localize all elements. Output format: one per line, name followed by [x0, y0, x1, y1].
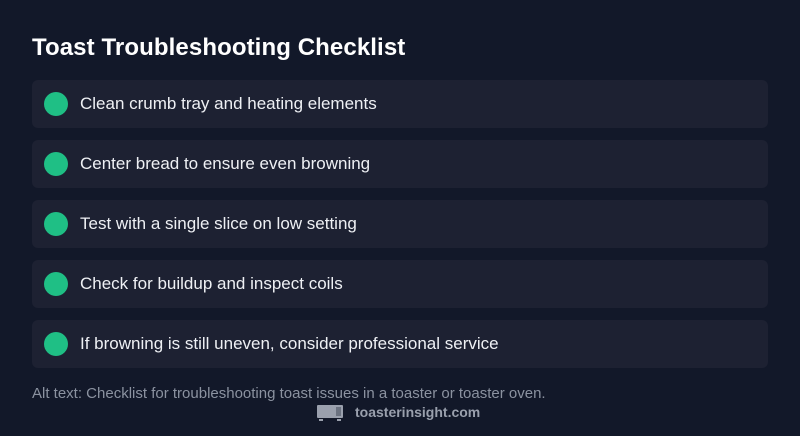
- item 1: [32, 80, 768, 128]
- item 4: [32, 260, 768, 308]
- item 5: If browning is still uneven, consider professional service: [80, 334, 499, 353]
- brand text: toasterinsight.com: [355, 404, 480, 420]
- item 3: Test with a single slice on low setting: [80, 214, 357, 233]
- icon: toaster oven: [317, 405, 343, 421]
- brand logo: [317, 404, 480, 421]
- item 3: [32, 200, 768, 248]
- item 2: [32, 140, 768, 188]
- alt text: Alt text: Checklist for troubleshooting toast issues in a toaster or toaster oven.: [32, 385, 546, 402]
- item 4: Check for buildup and inspect coils: [80, 274, 343, 293]
- item 5: [32, 320, 768, 368]
- title: Toast Troubleshooting Checklist: [32, 34, 405, 61]
- item 1: Clean crumb tray and heating elements: [80, 94, 377, 113]
- item 2: Center bread to ensure even browning: [80, 154, 370, 173]
